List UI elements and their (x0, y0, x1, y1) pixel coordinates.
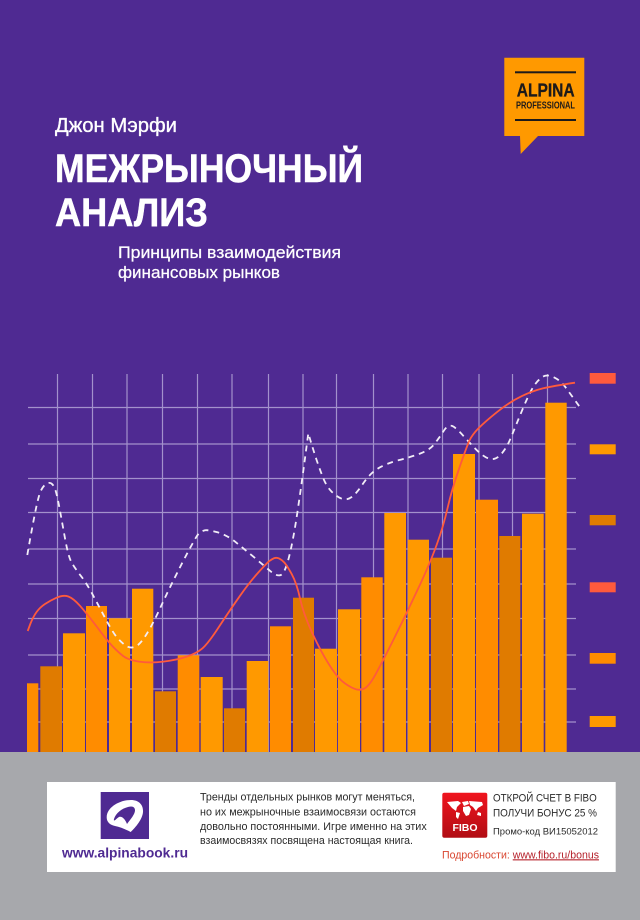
promo paragraph: взаимосвязях посвящена настоящая книга. (200, 835, 413, 847)
promo paragraph: но их межрыночные взаимосвязи остаются (200, 806, 416, 818)
icon: fibo logo: FIBO (452, 822, 478, 834)
grey footer band (0, 752, 640, 920)
subtitle (118, 243, 341, 282)
red line (28, 383, 575, 690)
fibo offer text: Промо-код ВИ15052012 (493, 826, 598, 837)
icon: alpina logo (101, 792, 149, 839)
promo paragraph: Тренды отдельных рынков могут меняться, (200, 792, 415, 804)
subtitle: Принципы взаимодействия (118, 243, 341, 262)
chart legend (590, 373, 616, 727)
subtitle: финансовых рынков (118, 263, 280, 282)
promo paragraph: довольно постоянными. Игре именно на этих (200, 821, 427, 833)
chart grid (28, 374, 576, 752)
author name: Джон Мэрфи (55, 115, 177, 137)
fibo offer text: ПОЛУЧИ БОНУС 25 % (493, 808, 597, 820)
fibo link: Подробности: www.fibo.ru/bonus (442, 849, 599, 861)
website url: www.alpinabook.ru (61, 846, 188, 861)
title: МЕЖРЫНОЧНЫЙ (55, 145, 363, 191)
icon: fibo logo (442, 793, 487, 838)
publisher badge (504, 58, 584, 154)
fibo offer text (493, 792, 598, 837)
title: АНАЛИЗ (55, 191, 208, 235)
publisher badge: ALPINA (517, 80, 575, 101)
publisher badge: PROFESSIONAL (516, 100, 575, 111)
dashed white line (27, 376, 580, 648)
bar chart (27, 403, 567, 752)
fibo offer text: ОТКРОЙ СЧЕТ В FIBO (493, 792, 597, 805)
white promo panel (47, 782, 616, 872)
title (55, 145, 363, 235)
promo paragraph (200, 792, 427, 847)
